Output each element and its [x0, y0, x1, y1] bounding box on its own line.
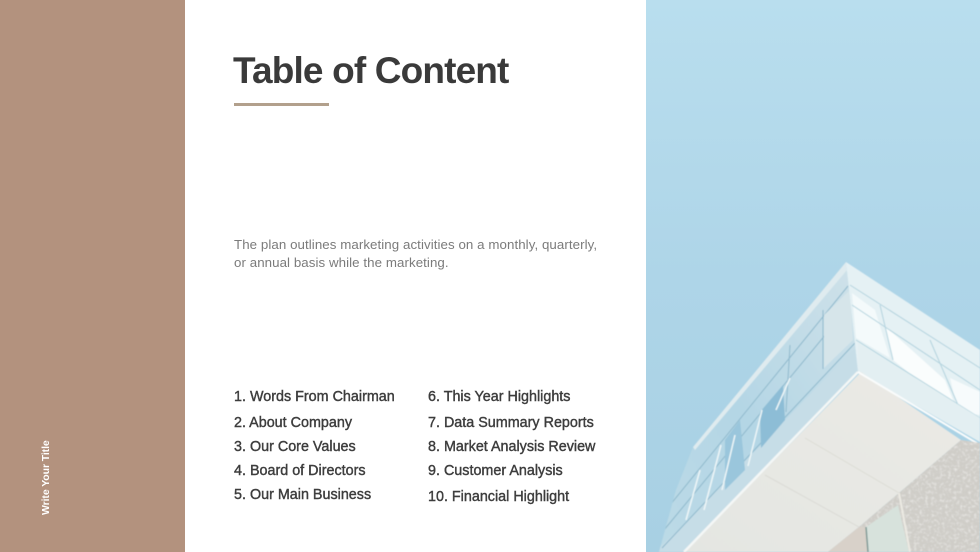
contents list: left column: 1. Words From Chairman	[234, 389, 395, 405]
intro text block: The plan outlines marketing activities on a monthly, quarterly,	[234, 237, 597, 252]
intro text block: or annual basis while the marketing.	[234, 255, 449, 270]
contents list: right column: 7. Data Summary Reports	[428, 415, 594, 431]
photo: building against blue sky	[646, 0, 980, 552]
contents list: left column: 3. Our Core Values	[234, 439, 356, 455]
contents list: right column: 8. Market Analysis Review	[428, 439, 595, 455]
intro text block	[234, 237, 597, 270]
contents list: left column	[234, 389, 395, 503]
brick wall	[828, 440, 980, 552]
soffit	[684, 372, 961, 552]
contents list: right column: 9. Customer Analysis	[428, 463, 563, 479]
contents list: right column: 10. Financial Highlight	[428, 489, 569, 505]
title: Table of Content	[233, 50, 509, 91]
window	[866, 505, 909, 552]
sidebar vertical title: Write Your Title	[40, 440, 52, 515]
left facade	[659, 262, 858, 552]
contents list: left column: 2. About Company	[234, 415, 352, 431]
panel: brown sidebar	[0, 0, 185, 552]
title underline	[234, 103, 329, 106]
right facade	[846, 262, 980, 442]
contents list: left column: 5. Our Main Business	[234, 487, 371, 503]
contents list: right column	[428, 389, 596, 505]
contents list: left column: 4. Board of Directors	[234, 463, 366, 479]
contents list: right column: 6. This Year Highlights	[428, 389, 570, 405]
